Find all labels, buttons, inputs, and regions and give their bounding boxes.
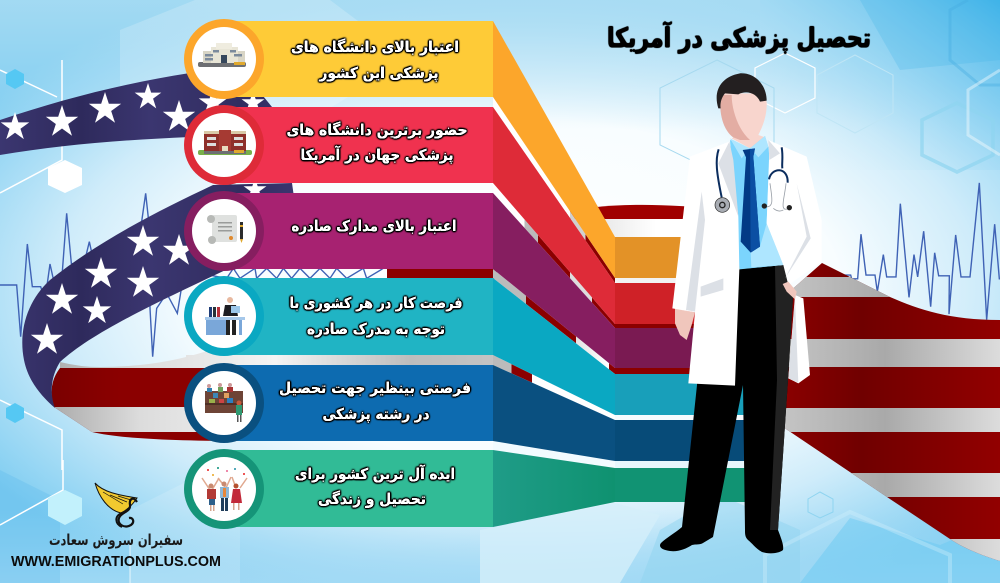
panel: item 5 <box>184 363 493 443</box>
text: item 2: پزشکی جهان در آمریکا <box>300 146 454 165</box>
icon: university building <box>198 43 246 67</box>
text: item 1 <box>291 38 459 83</box>
doctor coat <box>672 140 822 386</box>
text: item 6: ایده آل ترین کشور برای <box>295 465 455 483</box>
text: item 5: فرصتی بینظیر جهت تحصیل <box>279 379 471 397</box>
icon: celebrating people <box>202 467 247 511</box>
flag stripes behind bands <box>493 97 745 468</box>
doctor hand left <box>675 308 695 340</box>
band: red <box>493 107 745 324</box>
text: company name: سفیران سروش سعادت <box>49 531 183 549</box>
band: blue <box>493 365 745 461</box>
flag right <box>784 263 1000 561</box>
text: item 4 <box>290 294 462 338</box>
doctor hand right <box>783 282 797 299</box>
band: green <box>493 450 745 527</box>
text: item 4: توجه به مدرک صادره <box>307 320 445 338</box>
text: item 4: فرصت کار در هر کشوری با <box>290 294 462 312</box>
text: item 1: پزشکی این کشور <box>319 64 438 83</box>
flag ribbon left <box>0 73 500 448</box>
panel: item 2 <box>184 105 493 185</box>
doctor illustration <box>660 73 822 553</box>
text: item 6: تحصیل و زندگی <box>318 490 426 508</box>
icon: classroom <box>205 383 243 422</box>
band: purple <box>493 193 745 368</box>
panel: item 4 <box>184 276 493 356</box>
doctor shirt <box>730 136 783 269</box>
doctor tie <box>741 148 760 253</box>
doctor hair <box>717 73 767 108</box>
text: item 5 <box>279 379 471 424</box>
panel: item 3 <box>184 191 493 271</box>
panel: item 1 <box>184 19 493 99</box>
icon: brick building <box>198 130 252 155</box>
title: تحصیل پزشکی در آمریکا <box>607 21 871 54</box>
text: item 3: اعتبار بالای مدارک صادره <box>292 217 456 235</box>
text: item 2: حضور برترین دانشگاه های <box>286 121 468 139</box>
logo <box>11 483 221 570</box>
text: item 1: اعتبار بالای دانشگاه های <box>291 38 459 56</box>
doctor legs <box>660 265 793 553</box>
ECG line left <box>0 193 383 357</box>
icon: scroll and pen <box>207 215 243 244</box>
text: website: WWW.EMIGRATIONPLUS.COM <box>11 553 221 570</box>
band: yellow <box>493 21 745 278</box>
panel: item 6 <box>184 449 493 529</box>
doctor neck and face <box>720 93 767 148</box>
text: item 5: در رشته پزشکی <box>322 405 430 424</box>
stethoscope <box>715 147 792 212</box>
text: item 2 <box>286 121 468 165</box>
ECG line right <box>827 183 1000 320</box>
icon: logo bird <box>95 483 137 527</box>
icon: office desk and man <box>205 297 245 335</box>
text: item 6 <box>295 465 455 508</box>
band: teal <box>493 278 745 415</box>
